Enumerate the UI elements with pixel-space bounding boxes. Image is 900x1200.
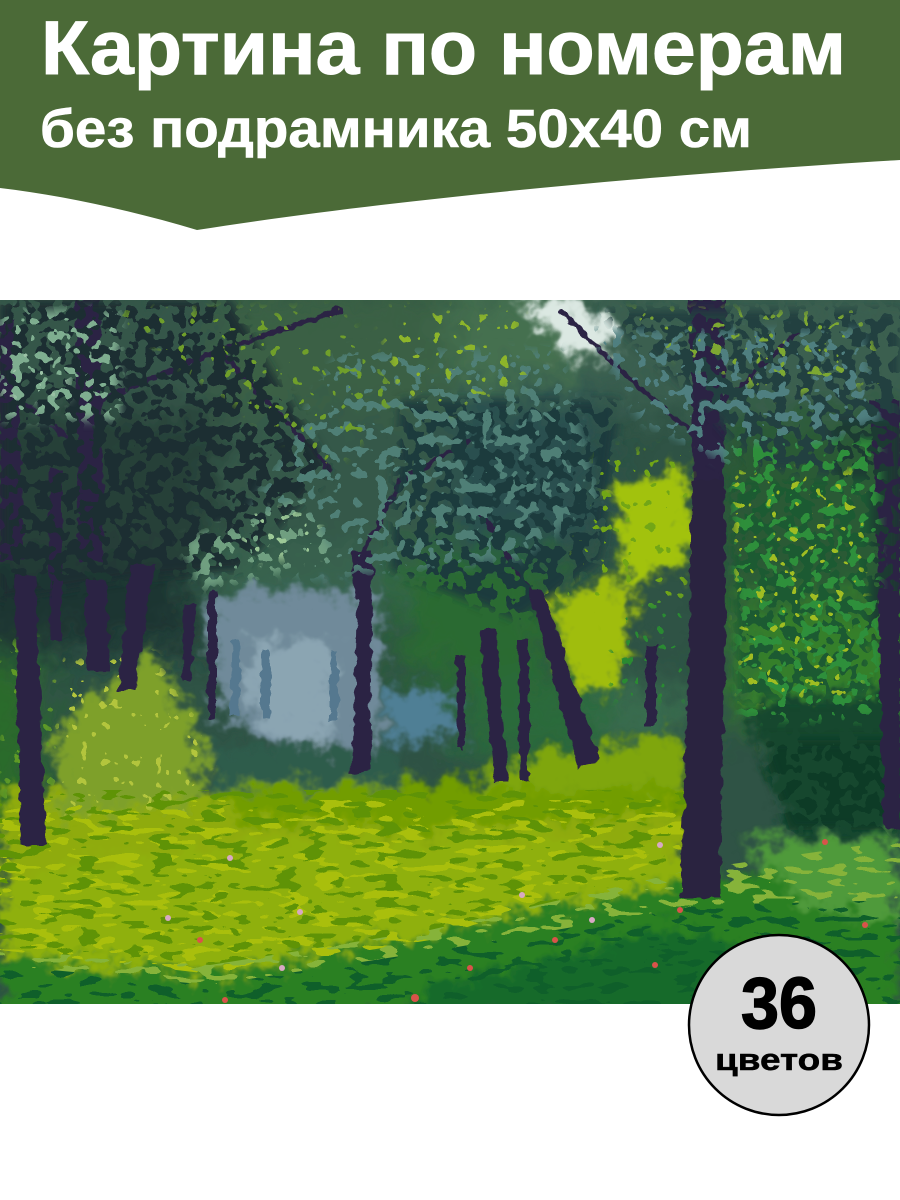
wildflowers xyxy=(197,839,868,1003)
painting: forest meadow xyxy=(0,280,900,1020)
badge label: цветов xyxy=(715,1042,843,1077)
foliage dabs: dark xyxy=(0,300,900,830)
meadow dabs: grass xyxy=(0,790,900,1010)
badge number: 36 xyxy=(741,964,817,1044)
foliage dabs: bright green xyxy=(0,310,890,815)
header banner xyxy=(0,0,900,230)
upper trunks and branches xyxy=(0,300,900,640)
tree trunks xyxy=(15,480,900,898)
foliage dabs: blue-green mid xyxy=(0,310,880,720)
meadow dabs: yellow xyxy=(0,800,690,975)
painting base colours xyxy=(0,280,900,1020)
title: Картина по номерам xyxy=(41,6,846,91)
badge: 36 colours xyxy=(689,935,869,1115)
subtitle: без подрамника 50х40 см xyxy=(40,99,752,159)
